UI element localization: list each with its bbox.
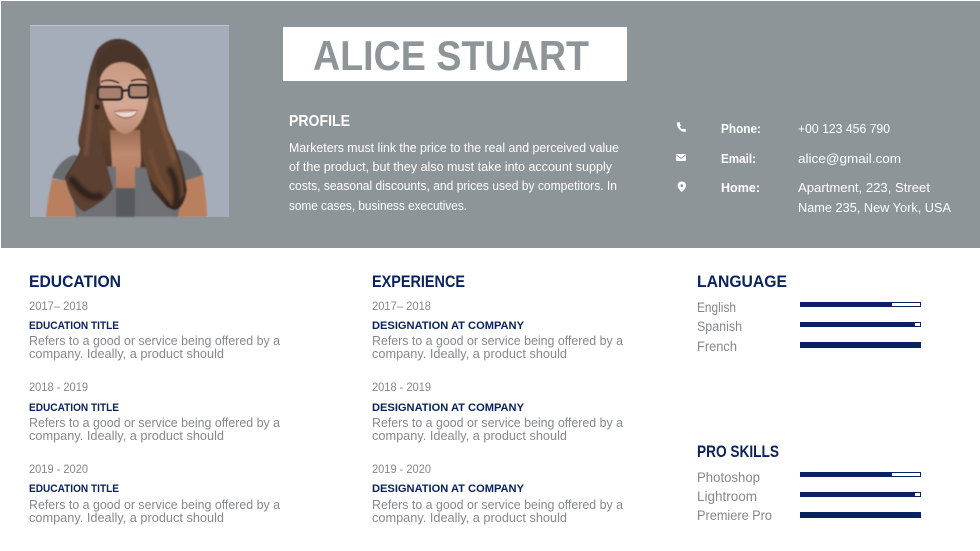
heading: pro skills: PRO SKILLS [697, 443, 779, 461]
contact details: Apartment, 223, Street [798, 180, 930, 195]
education entry 1: Refers to a good or service being offered by a [29, 333, 281, 348]
contact details: alice@gmail.com [798, 151, 901, 166]
education entry 2: 2018 - 2019 [29, 380, 88, 394]
experience entry 1: DESIGNATION AT COMPANY [372, 320, 525, 332]
education entry 2: EDUCATION TITLE [29, 402, 119, 414]
panel: experience [372, 273, 624, 525]
heading: education: EDUCATION [29, 273, 121, 291]
profile text: of the product, but they also must take into account supply [289, 160, 613, 174]
contact details: +00 123 456 790 [798, 121, 890, 136]
experience entry 2: company. Ideally, a product should [372, 428, 567, 443]
name banner: ALICE STUART [313, 32, 589, 79]
experience entry 3: company. Ideally, a product should [372, 510, 567, 525]
experience entry 3: 2019 - 2020 [372, 462, 431, 476]
experience entry 3: DESIGNATION AT COMPANY [372, 483, 525, 495]
experience entry 2: 2018 - 2019 [372, 380, 431, 394]
contact details: Phone: [721, 121, 761, 136]
skill bar: Photoshop: Photoshop [697, 469, 760, 485]
experience entry 3 [372, 462, 624, 525]
panel: pro skills [697, 443, 921, 523]
skill bar: Spanish [697, 318, 920, 334]
icon: phone [677, 122, 686, 132]
skill bar: English: English [697, 299, 736, 315]
education entry 3: 2019 - 2020 [29, 462, 88, 476]
profile text: Marketers must link the price to the real and perceived value [289, 141, 619, 155]
skill bar: French: French [697, 338, 737, 354]
profile text: some cases, business executives. [289, 199, 467, 213]
skill bar: Premiere Pro [697, 507, 921, 523]
experience entry 1: Refers to a good or service being offered by a [372, 333, 624, 348]
icon: email [676, 154, 686, 161]
heading: language: LANGUAGE [697, 273, 787, 291]
education entry 2: company. Ideally, a product should [29, 428, 224, 443]
portrait photo [30, 25, 229, 217]
education entry 2 [29, 380, 281, 443]
profile text: costs, seasonal discounts, and prices used by competitors. In [289, 179, 617, 193]
education entry 1: 2017– 2018 [29, 299, 88, 313]
skill bar: Lightroom [697, 488, 920, 504]
education entry 2: Refers to a good or service being offered by a [29, 415, 281, 430]
education entry 3: Refers to a good or service being offered by a [29, 497, 281, 512]
experience entry 2: DESIGNATION AT COMPANY [372, 402, 525, 414]
experience entry 2 [372, 380, 624, 443]
experience entry 1: company. Ideally, a product should [372, 346, 567, 361]
profile heading: PROFILE [289, 113, 350, 130]
contact details: Home: [721, 180, 760, 195]
contact details: Email: [721, 151, 756, 166]
skill bar: French [697, 338, 921, 354]
education entry 3 [29, 462, 281, 525]
skill bar: Photoshop [697, 469, 920, 485]
education entry 1: EDUCATION TITLE [29, 320, 119, 332]
skill bar: Lightroom: Lightroom [697, 488, 757, 504]
contact details [721, 121, 951, 215]
education entry 1: company. Ideally, a product should [29, 346, 224, 361]
panel: language [697, 273, 921, 354]
experience entry 2: Refers to a good or service being offered by a [372, 415, 624, 430]
heading: experience: EXPERIENCE [372, 273, 465, 291]
skill bar: Spanish: Spanish [697, 318, 742, 334]
experience entry 1 [372, 299, 624, 361]
experience entry 1: 2017– 2018 [372, 299, 431, 313]
education entry 3: EDUCATION TITLE [29, 483, 119, 495]
profile text [289, 141, 619, 213]
panel: education [29, 273, 281, 525]
header band [1, 1, 980, 248]
icon: location pin [678, 182, 686, 192]
skill bar: Premiere Pro: Premiere Pro [697, 507, 772, 523]
education entry 1 [29, 299, 281, 361]
contact details: Name 235, New York, USA [798, 200, 951, 215]
education entry 3: company. Ideally, a product should [29, 510, 224, 525]
skill bar: English [697, 299, 920, 315]
experience entry 3: Refers to a good or service being offered by a [372, 497, 624, 512]
